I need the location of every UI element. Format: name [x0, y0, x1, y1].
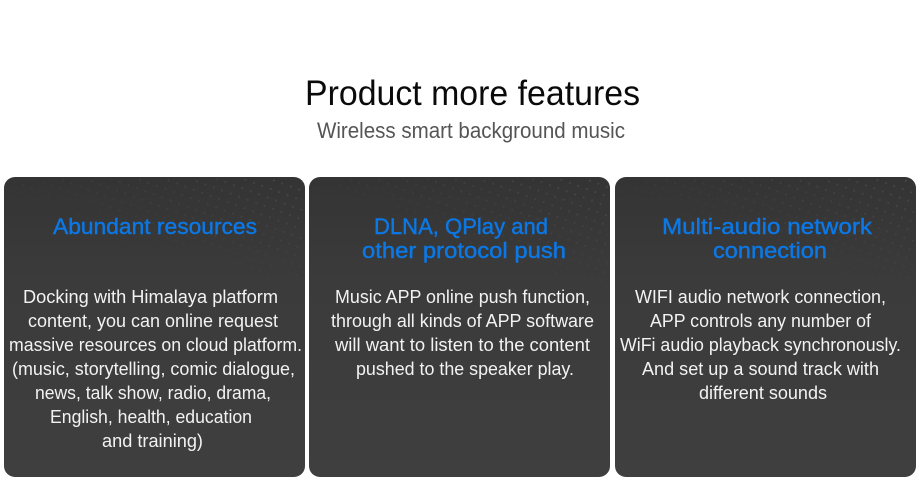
- body text: Music APP online push function,: [335, 287, 590, 307]
- dot texture: [6, 179, 303, 247]
- panel: multi-audio: [615, 177, 916, 477]
- body text: news, talk show, radio, drama,: [35, 383, 271, 403]
- heading: Abundant resources: [53, 214, 257, 239]
- body text: [620, 287, 901, 403]
- body text: through all kinds of APP software: [331, 311, 594, 331]
- panel: abundant resources: [4, 177, 305, 477]
- body text: And set up a sound track with: [642, 359, 879, 379]
- body text: WiFi audio playback synchronously.: [620, 335, 901, 355]
- body text: (music, storytelling, comic dialogue,: [12, 359, 295, 379]
- panel background: [4, 177, 305, 477]
- body text: APP controls any number of: [650, 311, 872, 331]
- heading: connection: [713, 238, 827, 263]
- panel: DLNA QPlay: [309, 177, 610, 477]
- heading: [362, 214, 566, 263]
- panel background: [615, 177, 916, 477]
- panel background: [309, 177, 610, 477]
- heading: DLNA, QPlay and: [374, 214, 548, 239]
- body text: will want to listen to the content: [334, 335, 590, 355]
- body text: different sounds: [699, 383, 827, 403]
- body text: Docking with Himalaya platform: [23, 287, 278, 307]
- body text: WIFI audio network connection,: [635, 287, 886, 307]
- dot texture: [695, 179, 914, 250]
- body text: and training): [102, 431, 203, 451]
- body text: content, you can online request: [28, 311, 278, 331]
- heading: [662, 214, 873, 263]
- body text: pushed to the speaker play.: [356, 359, 574, 379]
- body text: [331, 287, 594, 379]
- title: Product more features: [305, 74, 640, 113]
- dot texture: [407, 179, 608, 252]
- heading: Multi-audio network: [662, 214, 873, 239]
- body text: English, health, education: [50, 407, 252, 427]
- body text: [9, 287, 302, 451]
- heading: other protocol push: [362, 238, 566, 263]
- subtitle: Wireless smart background music: [317, 118, 625, 143]
- body text: massive resources on cloud platform.: [9, 335, 302, 355]
